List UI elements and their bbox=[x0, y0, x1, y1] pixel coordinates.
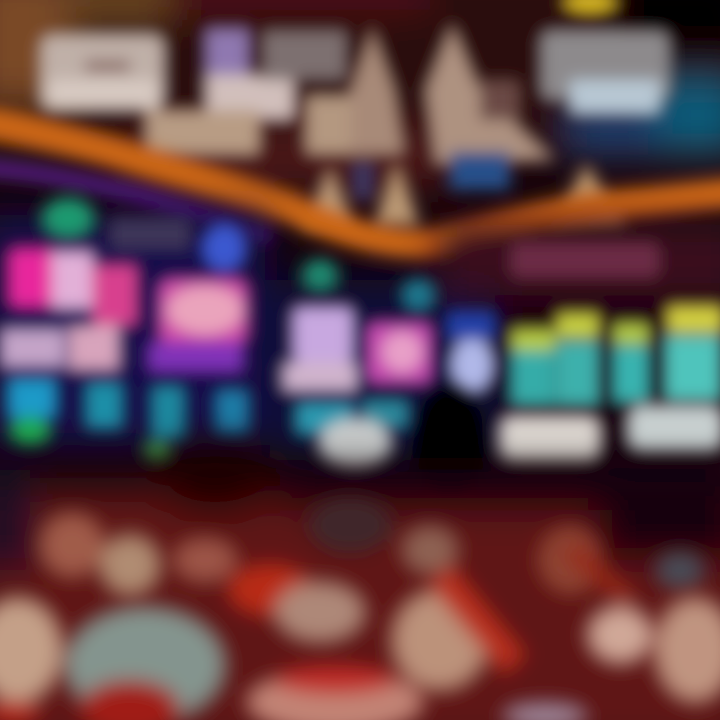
top backdrop bbox=[0, 0, 720, 190]
blurred sign lettering bbox=[40, 22, 670, 230]
dark silhouette bbox=[414, 385, 486, 505]
machine area backdrop bbox=[0, 215, 720, 470]
crowd backdrop bbox=[0, 445, 720, 720]
purple underglow bbox=[0, 168, 270, 238]
crowd heads bbox=[0, 497, 720, 720]
right slot screens bbox=[500, 305, 720, 460]
center slot screens bbox=[282, 259, 495, 467]
maroon sign bbox=[510, 242, 660, 278]
yellow lamp bbox=[562, 0, 618, 14]
left slot screens bbox=[0, 198, 248, 460]
orange ribbon band bbox=[0, 122, 720, 244]
